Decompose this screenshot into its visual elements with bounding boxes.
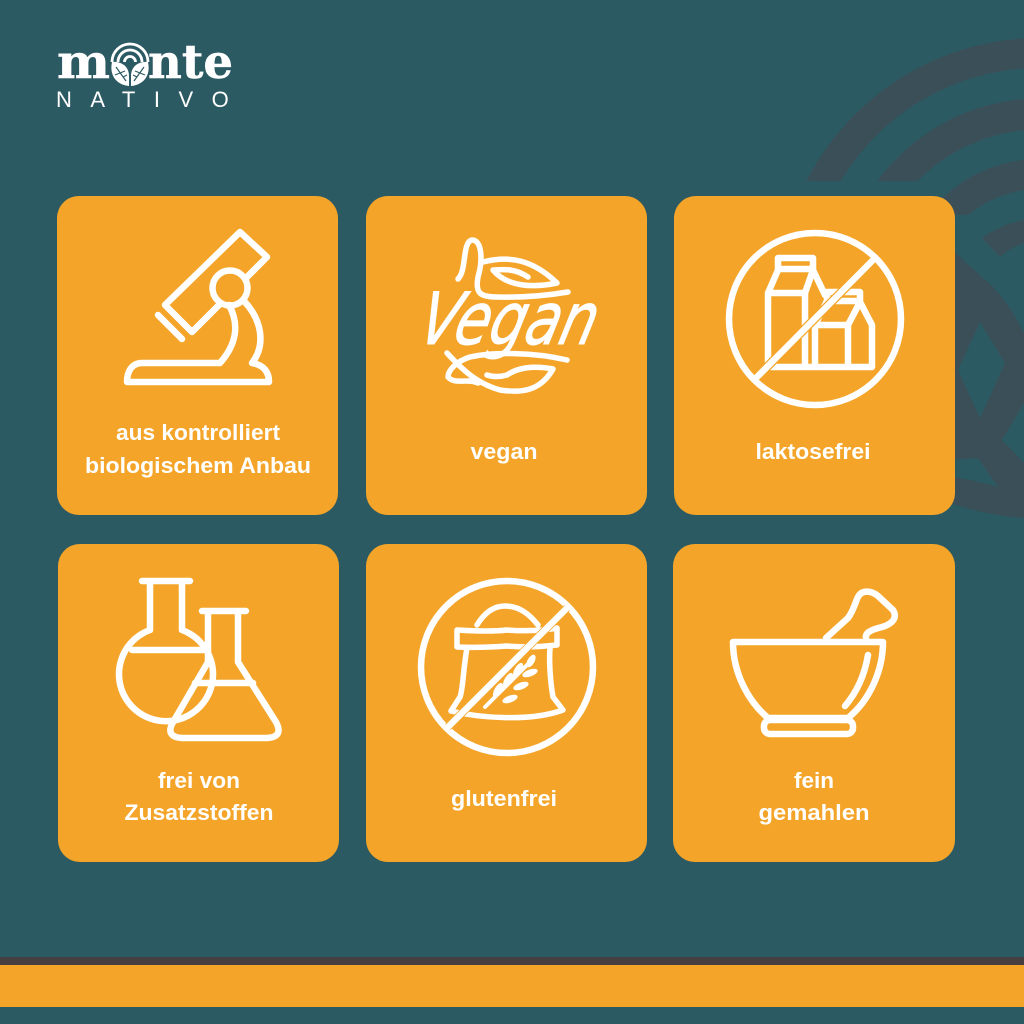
label: frei von (158, 768, 240, 793)
label: glutenfrei (451, 786, 557, 811)
card background (366, 544, 647, 862)
panel: laktosefrei (674, 196, 955, 515)
label: laktosefrei (756, 439, 870, 464)
panel: glutenfrei (366, 544, 647, 862)
logo wordmark: monte (57, 35, 233, 90)
logo emblem: arcs and leaves (111, 44, 149, 86)
icon: microscope (127, 232, 269, 382)
label (85, 420, 311, 478)
logo wordmark: monte: m (57, 35, 110, 90)
logo: Monte Nativo (56, 35, 247, 112)
label: biologischem Anbau (85, 453, 311, 478)
label: fein (794, 768, 834, 793)
background watermark: logo arcs and leaves (793, 53, 1024, 547)
logo subtitle: NATIVO: NATIVO (56, 87, 247, 112)
icon: crossed-out milk cartons (729, 233, 901, 405)
card background (366, 196, 647, 515)
panel: aus kontrolliert biologischem Anbau (57, 196, 338, 515)
label: Zusatzstoffen (124, 800, 274, 825)
label: vegan (470, 439, 538, 464)
icon: crossed-out grain sack (421, 581, 593, 753)
icon: mortar and pestle (733, 592, 895, 734)
panel: vegan (366, 196, 647, 515)
icon: vegan lettering with leaves: Vegan (412, 278, 608, 362)
icon: vegan lettering with leaves (412, 240, 608, 391)
label: aus kontrolliert (116, 420, 281, 445)
label (124, 768, 274, 825)
logo wordmark: monte: nte (148, 35, 233, 90)
card background (674, 196, 955, 515)
panel: frei von Zusatzstoffen (58, 544, 339, 862)
card background (57, 196, 338, 515)
label (758, 768, 870, 825)
label: gemahlen (758, 800, 870, 825)
card background (58, 544, 339, 862)
icon: laboratory flasks (119, 581, 279, 738)
panel: fein gemahlen (673, 544, 955, 862)
footer band (0, 957, 1024, 1007)
card background (673, 544, 955, 862)
